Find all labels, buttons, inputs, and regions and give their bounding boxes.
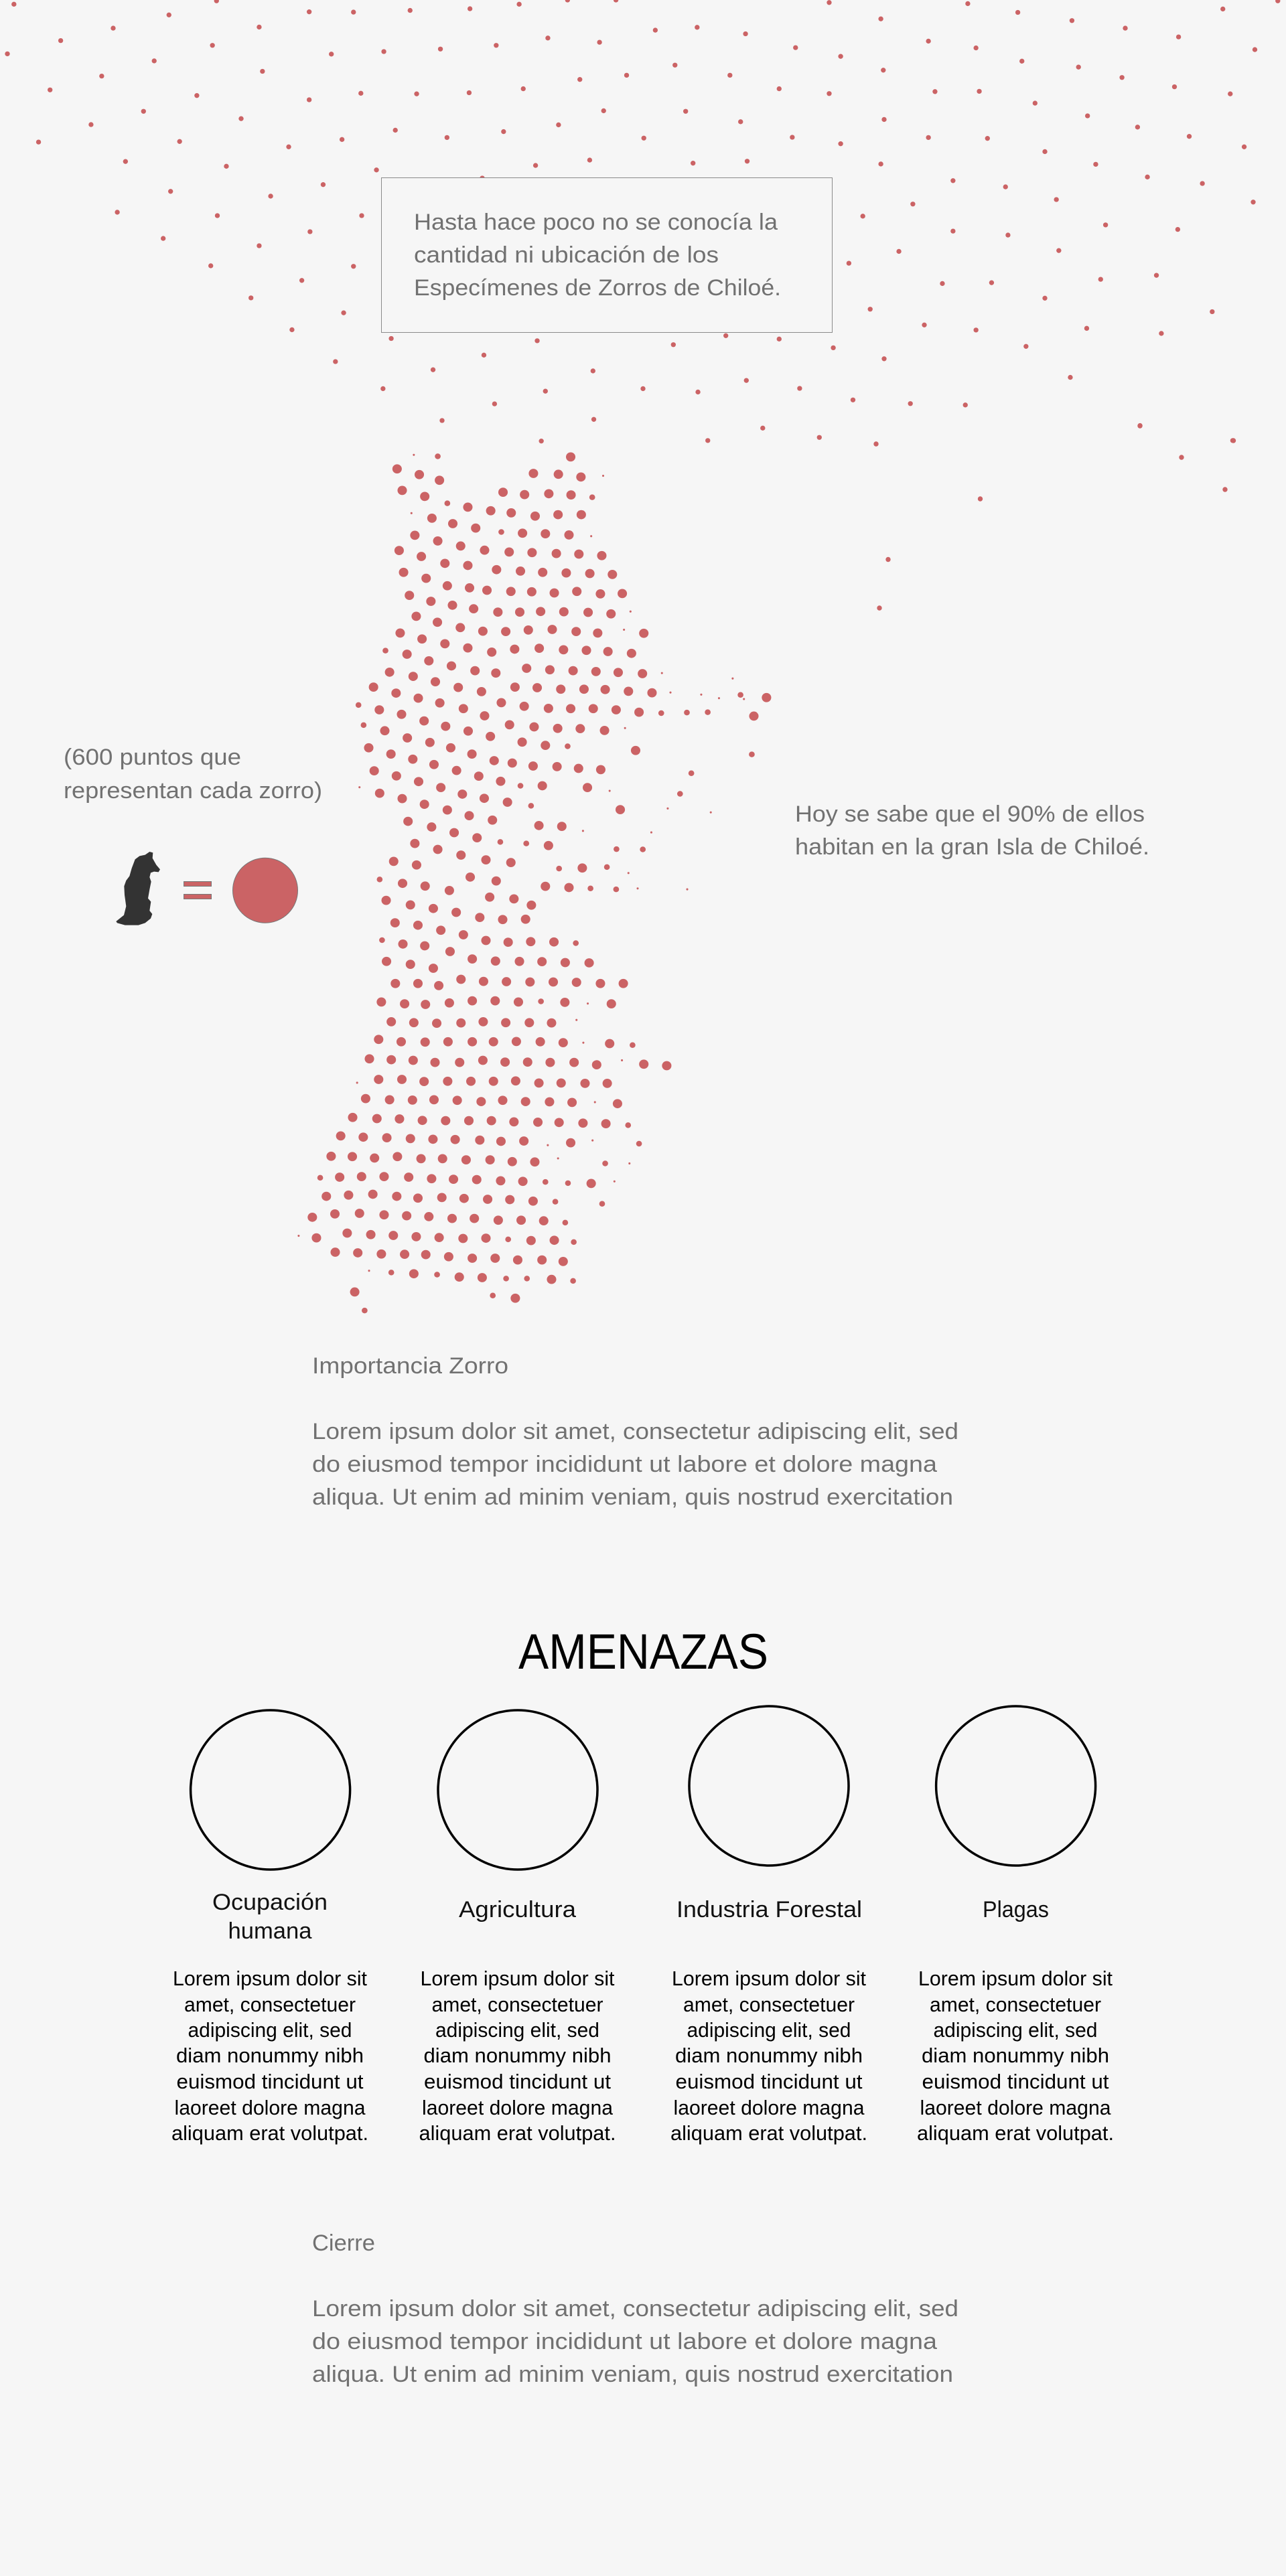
column text: aliquam erat volutpat. xyxy=(171,2121,368,2145)
column text: diam nonummy nibh xyxy=(176,2044,364,2067)
column text: amet, consectetuer xyxy=(930,1993,1101,2016)
column text: euismod tincidunt ut xyxy=(922,2070,1109,2093)
icon circle xyxy=(689,1706,849,1866)
column text: adipiscing elit, sed xyxy=(934,2018,1097,2042)
column text: Lorem ipsum dolor sit xyxy=(918,1967,1113,1990)
callout box: intro: cantidad ni ubicación de los xyxy=(414,242,719,268)
column text: amet, consectetuer xyxy=(683,1993,855,2016)
text: 90% on Chiloé xyxy=(795,802,1149,860)
column text: diam nonummy nibh xyxy=(423,2044,611,2067)
callout box: intro xyxy=(382,178,832,332)
text block: Cierre: Lorem ipsum dolor sit amet, consectetur adipiscing elit, sed xyxy=(312,2296,958,2322)
threat column: Plagas xyxy=(917,1706,1114,2145)
text block: Importancia Zorro: do eiusmod tempor incididunt ut labore et dolore magna xyxy=(312,1452,937,1477)
column title: Plagas xyxy=(983,1897,1049,1922)
column text: euismod tincidunt ut xyxy=(424,2070,611,2093)
text block: Cierre: Cierre xyxy=(312,2230,375,2256)
icon circle xyxy=(191,1710,350,1870)
column text: adipiscing elit, sed xyxy=(188,2018,352,2042)
column text: laoreet dolore magna xyxy=(674,2096,865,2119)
column text: aliquam erat volutpat. xyxy=(917,2121,1114,2145)
column text: aliquam erat volutpat. xyxy=(419,2121,616,2145)
icon: equals sign xyxy=(184,881,212,899)
text block: Importancia Zorro xyxy=(312,1353,958,1510)
icon: red dot xyxy=(233,858,297,923)
scattered fox dots xyxy=(5,0,1280,611)
callout box: intro: Especímenes de Zorros de Chiloé. xyxy=(414,275,781,301)
text block: Cierre: aliqua. Ut enim ad minim veniam, quis nostrud exercitation xyxy=(312,2362,953,2387)
column text: amet, consectetuer xyxy=(184,1993,356,2016)
text block: Cierre xyxy=(312,2230,958,2387)
column text: adipiscing elit, sed xyxy=(435,2018,599,2042)
column text: adipiscing elit, sed xyxy=(687,2018,851,2042)
text block: Importancia Zorro: Importancia Zorro xyxy=(312,1353,508,1379)
column text: diam nonummy nibh xyxy=(922,2044,1109,2067)
column text: laoreet dolore magna xyxy=(174,2096,366,2119)
text block: Importancia Zorro: aliqua. Ut enim ad minim veniam, quis nostrud exercitation xyxy=(312,1485,953,1510)
column text: Lorem ipsum dolor sit xyxy=(672,1967,866,1990)
column title: humana xyxy=(228,1918,312,1944)
legend: 600 dots note xyxy=(64,745,322,804)
text block: Importancia Zorro: Lorem ipsum dolor sit amet, consectetur adipiscing elit, sed xyxy=(312,1419,958,1444)
column text xyxy=(171,1967,368,2145)
text block: Cierre: do eiusmod tempor incididunt ut labore et dolore magna xyxy=(312,2329,937,2354)
dot map of Chiloé island xyxy=(297,453,771,1313)
callout box: intro: Hasta hace poco no se conocía la xyxy=(414,210,778,235)
column text xyxy=(419,1967,616,2145)
column text: euismod tincidunt ut xyxy=(675,2070,863,2093)
threat column: Agricultura xyxy=(419,1710,616,2145)
column text xyxy=(670,1967,867,2145)
column text: laoreet dolore magna xyxy=(920,2096,1111,2119)
column text: laoreet dolore magna xyxy=(422,2096,614,2119)
text: 90% on Chiloé: habitan en la gran Isla de Chiloé. xyxy=(795,834,1149,860)
column text: Lorem ipsum dolor sit xyxy=(173,1967,367,1990)
column text: amet, consectetuer xyxy=(431,1993,603,2016)
column title: Ocupación xyxy=(212,1890,328,1915)
column text: diam nonummy nibh xyxy=(675,2044,863,2067)
column text xyxy=(917,1967,1114,2145)
legend: 600 dots note: (600 puntos que xyxy=(64,745,241,770)
column text: Lorem ipsum dolor sit xyxy=(421,1967,615,1990)
column title: Industria Forestal xyxy=(676,1897,862,1922)
column text: euismod tincidunt ut xyxy=(177,2070,364,2093)
icon circle xyxy=(936,1706,1096,1866)
column title: Agricultura xyxy=(459,1897,576,1922)
column title xyxy=(212,1890,328,1944)
column text: aliquam erat volutpat. xyxy=(670,2121,867,2145)
heading: AMENAZAS: AMENAZAS xyxy=(518,1624,768,1679)
threat column: Ocupación humana xyxy=(171,1710,368,2145)
text: 90% on Chiloé: Hoy se sabe que el 90% de ellos xyxy=(795,802,1145,827)
icon circle xyxy=(438,1710,597,1870)
legend: 600 dots note: representan cada zorro) xyxy=(64,778,322,804)
threat column: Industria Forestal xyxy=(670,1706,867,2145)
icon: fox silhouette xyxy=(116,852,160,925)
